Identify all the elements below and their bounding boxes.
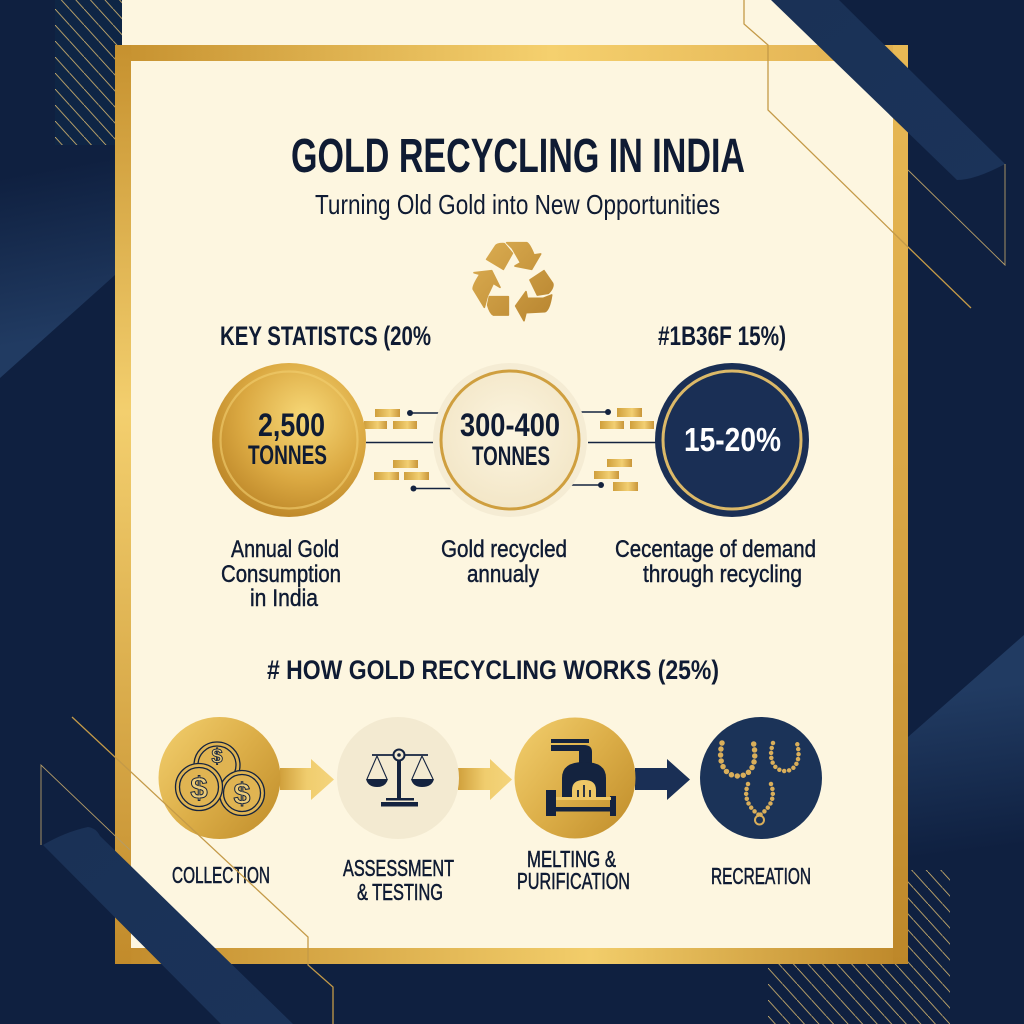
- label: assessment and testing: & TESTING: [357, 879, 443, 905]
- step: collection icon: $: [234, 778, 251, 811]
- label: recycled annually: Gold recycled: [441, 536, 567, 563]
- title: GOLD RECYCLING IN INDIA: [291, 130, 745, 183]
- heading: key statistics: KEY STATISTCS (20%: [220, 321, 431, 351]
- label: assessment and testing: ASSESSMENT: [343, 855, 454, 881]
- arrow: step 3 to 4: [635, 759, 690, 800]
- ribbon: bottom left: [43, 827, 293, 1024]
- arrow: step 1 to 2: [280, 759, 334, 800]
- label: annual consumption: Annual Gold: [231, 536, 339, 563]
- step: collection icon: $: [211, 746, 223, 768]
- label: percentage of demand: Cecentage of demand: [615, 536, 816, 563]
- icon: recycling symbol: [473, 243, 553, 321]
- heading: right statistic: #1B36F 15%): [658, 321, 786, 351]
- label: percentage of demand: [615, 536, 816, 588]
- heading: how it works: # HOW GOLD RECYCLING WORKS (25%): [267, 655, 719, 685]
- label: melting and purification: MELTING &: [527, 846, 616, 872]
- label: annual consumption: in India: [250, 585, 319, 612]
- subtitle: Turning Old Gold into New Opportunities: [315, 189, 720, 220]
- label: collection: COLLECTION: [172, 862, 270, 888]
- step: collection icon: $: [190, 770, 208, 805]
- label: melting and purification: PURIFICATION: [517, 868, 630, 894]
- stat: 15-20%: 15-20%: [684, 421, 781, 458]
- step: furnace icon: [514, 718, 636, 838]
- stat: 300-400 tonnes: TONNES: [472, 441, 550, 471]
- label: assessment and testing: [343, 855, 454, 905]
- label: recreation: RECREATION: [711, 863, 811, 889]
- label: percentage of demand: through recycling: [643, 561, 802, 588]
- step: jewellery icon: [700, 717, 822, 839]
- label: annual consumption: [221, 536, 341, 612]
- label: melting and purification: [517, 846, 630, 894]
- stat: 300-400 tonnes: 300-400: [460, 407, 560, 443]
- cream sheet behind frame top: [122, 0, 822, 50]
- step: assessment icon: [337, 717, 459, 839]
- label: annual consumption: Consumption: [221, 561, 341, 588]
- connectors: gold bricks and lines: [364, 408, 656, 492]
- stat: 2,500 tonnes: TONNES: [248, 440, 327, 470]
- label: recycled annually: [441, 536, 567, 588]
- stat: 2,500 tonnes: 2,500: [258, 407, 325, 443]
- step: collection icon: [158, 717, 280, 839]
- arrow: step 2 to 3: [458, 759, 512, 800]
- stat: 15-20%: [655, 363, 809, 517]
- stat: 2,500 tonnes: [212, 363, 366, 517]
- label: recycled annually: annualy: [467, 561, 539, 588]
- gold frame with cream panel: [115, 45, 908, 964]
- stat: 300-400 tonnes: [433, 363, 587, 517]
- ribbon: top right: [771, 0, 1005, 180]
